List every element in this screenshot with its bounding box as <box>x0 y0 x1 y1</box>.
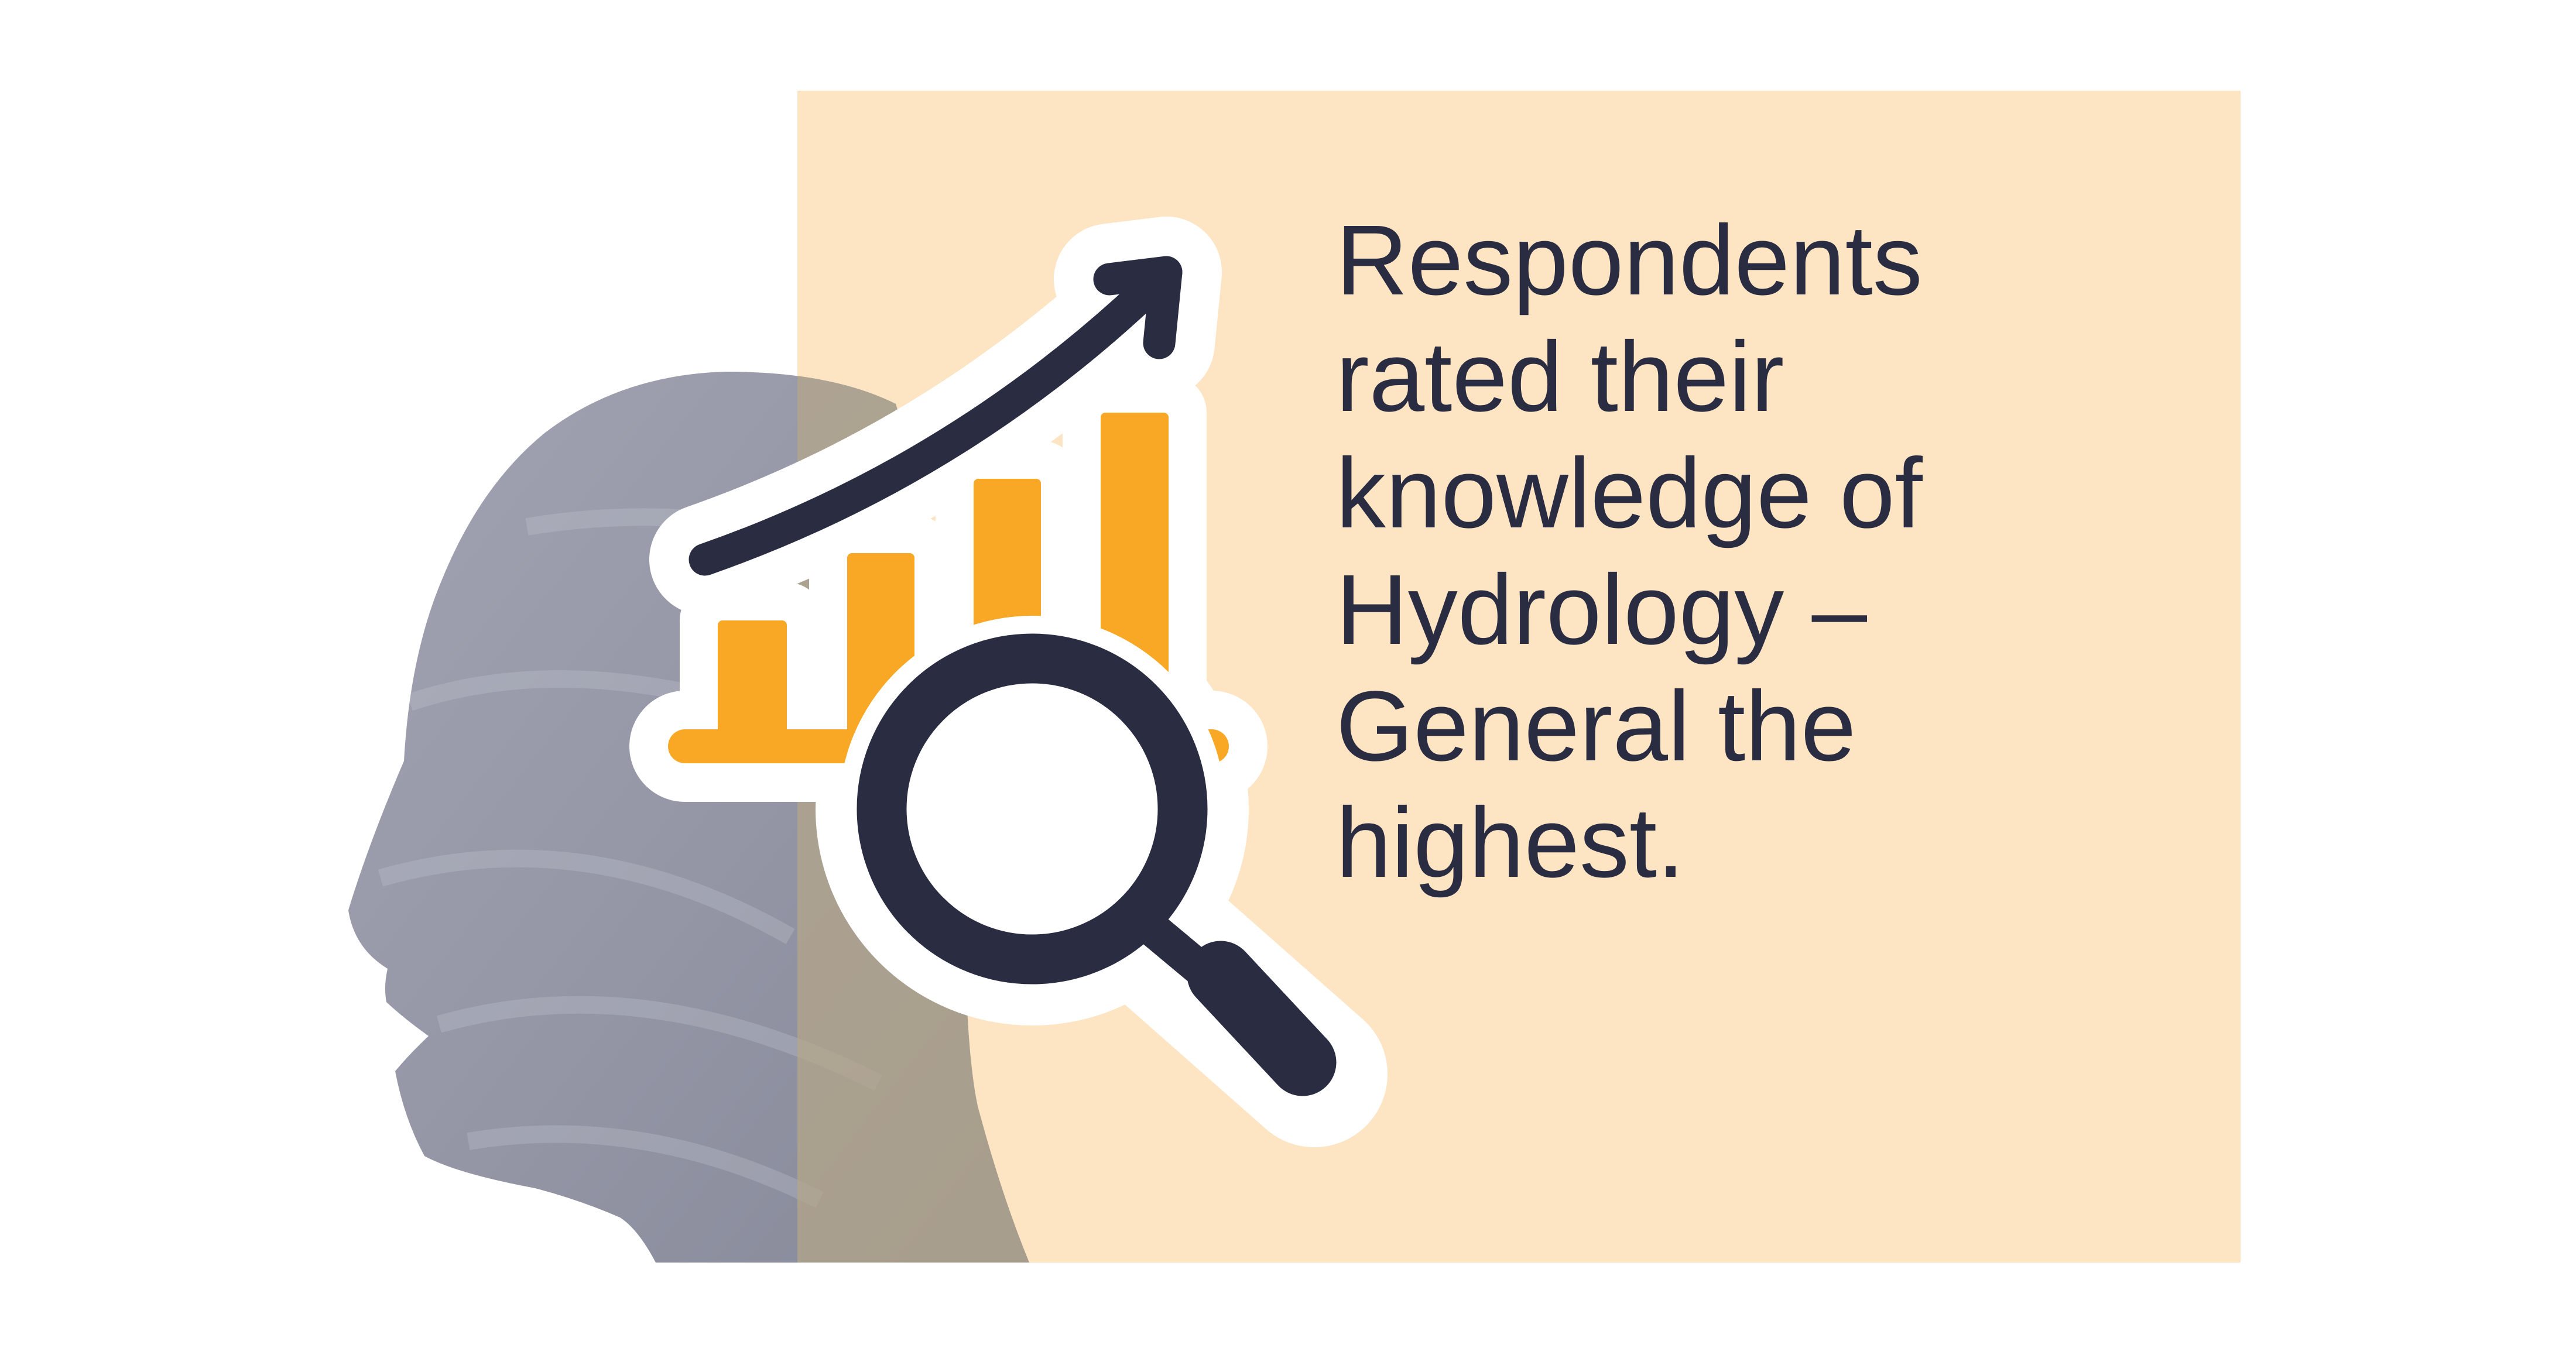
head silhouette <box>348 372 1029 1263</box>
text block: highest. <box>1336 787 1684 898</box>
text block: Respondents <box>1336 205 1923 316</box>
panel: peach background <box>797 91 2241 1263</box>
icon: chart with magnifier <box>685 272 1314 1074</box>
magnifier <box>839 616 1303 1062</box>
text block: knowledge of <box>1336 438 1923 549</box>
arrow <box>705 272 1166 560</box>
text block: Hydrology – <box>1336 554 1868 666</box>
bars <box>685 413 1212 746</box>
text block: rated their <box>1336 321 1784 433</box>
text block: General the <box>1336 671 1856 782</box>
